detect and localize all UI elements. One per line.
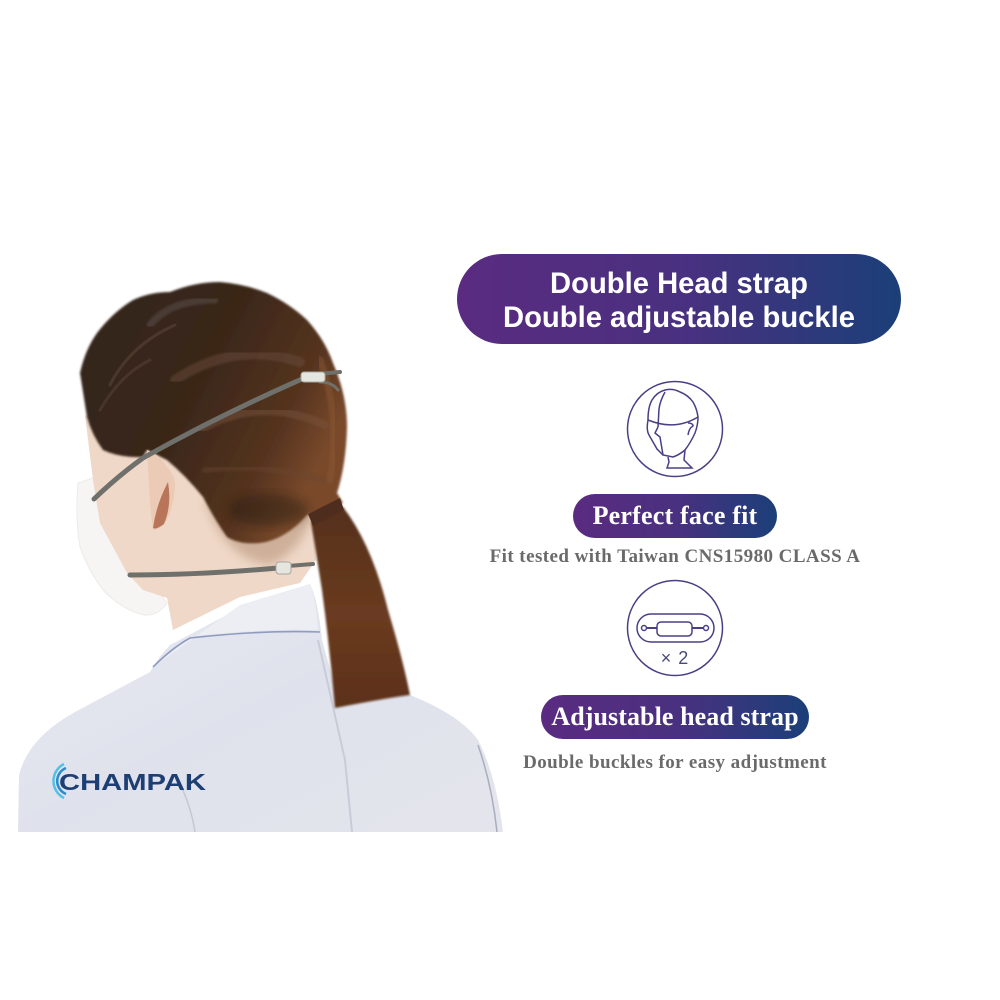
lower head strap	[130, 562, 313, 575]
photo: woman from behind wearing mask with double head strap	[18, 280, 503, 832]
logo: CHAMPAK	[53, 764, 206, 798]
heading pill: Double Head strap	[550, 268, 808, 300]
text: double buckles: Double buckles for easy adjustment	[523, 752, 827, 773]
label pill: adjustable head strap: Adjustable head strap	[551, 702, 799, 731]
shirt	[18, 584, 503, 832]
icon: head with strap	[626, 380, 724, 478]
text: fit tested: Fit tested with Taiwan CNS15980 CLASS A	[490, 546, 860, 567]
icon: adjustable buckle x2: × 2	[661, 648, 689, 668]
hair	[80, 282, 347, 543]
label pill: perfect face fit: Perfect face fit	[593, 501, 757, 530]
hair shine and strands	[100, 300, 334, 526]
ear	[147, 450, 175, 530]
label pill: perfect face fit	[573, 494, 777, 538]
upper head strap	[94, 372, 340, 499]
hair tie	[308, 498, 344, 526]
label pill: adjustable head strap	[541, 695, 809, 739]
ponytail	[311, 507, 410, 708]
mask	[77, 478, 167, 615]
heading pill	[457, 254, 901, 344]
nape shadow	[205, 500, 315, 565]
heading pill: Double adjustable buckle	[503, 302, 855, 334]
neck and face skin	[85, 415, 316, 630]
logo: CHAMPAK: CHAMPAK	[59, 769, 206, 795]
icon: adjustable buckle x2	[626, 580, 724, 676]
